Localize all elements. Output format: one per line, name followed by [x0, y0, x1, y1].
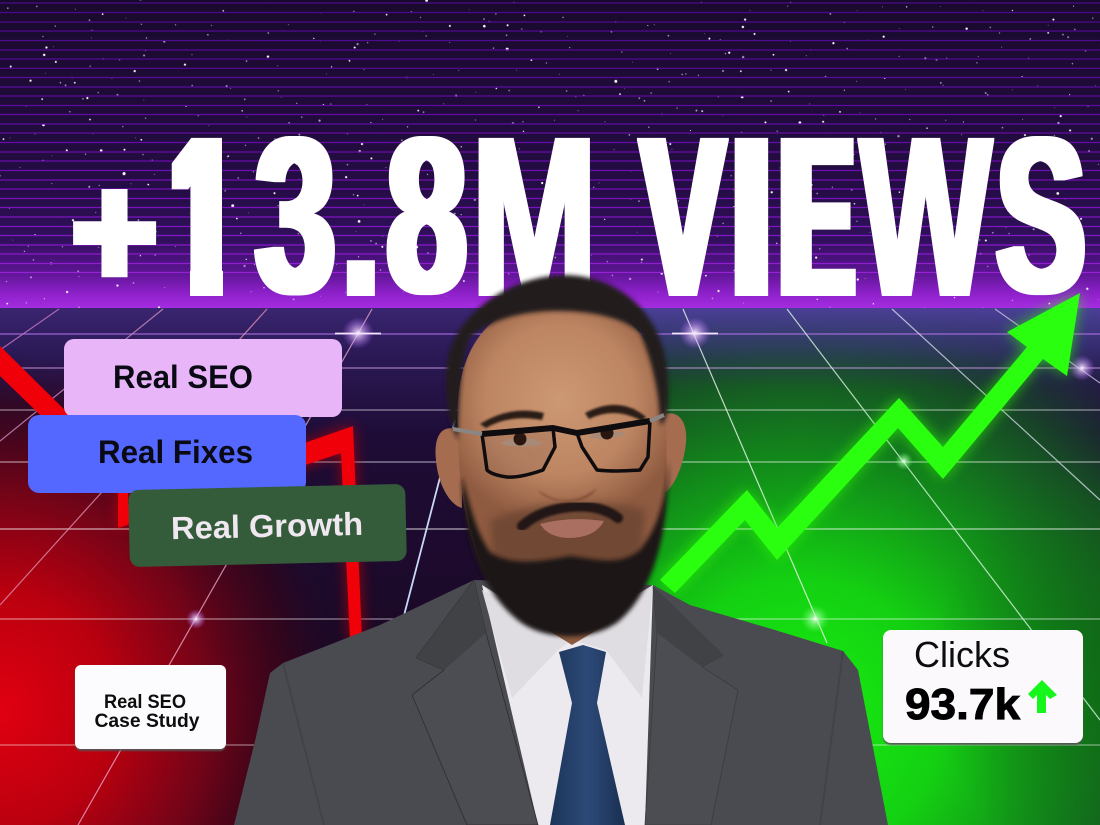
- stubble around mouth: [490, 502, 645, 575]
- icon: green rising arrow: [660, 293, 1080, 593]
- moustache: [522, 506, 618, 526]
- card: Clicks stat: Clicks: [914, 634, 1010, 675]
- eyebrows: [480, 411, 544, 428]
- headline: 3: [256, 92, 335, 340]
- tag: Real Growth: [128, 484, 407, 567]
- tag: Real Growth: Real Growth: [171, 506, 363, 546]
- card: Clicks stat: [883, 630, 1083, 743]
- face: [457, 298, 667, 601]
- shirt: [482, 585, 653, 825]
- headline: W: [860, 91, 992, 344]
- necktie: [550, 645, 625, 825]
- tag: Real Fixes: Real Fixes: [98, 434, 253, 470]
- tag: Real SEO: [64, 339, 342, 417]
- tag: Real SEO: Real SEO: [113, 359, 253, 395]
- nose shadow: [538, 488, 597, 502]
- lens tint: [482, 428, 555, 477]
- icon: small green up arrow: [1028, 680, 1057, 713]
- portrait of man in suit and glasses: [234, 275, 888, 825]
- headline: +: [72, 141, 157, 322]
- suit sleeve seams: [283, 651, 843, 825]
- right lapels: [645, 587, 738, 825]
- floor grid lines: [0, 309, 1100, 825]
- flares on grid intersections: [186, 317, 1095, 633]
- glasses: [453, 415, 664, 477]
- beard: [462, 460, 669, 636]
- tag: Real Fixes: [28, 415, 306, 493]
- lips: [540, 519, 604, 538]
- background: starry sky with scan lines: [0, 0, 1100, 308]
- headline: [73, 136, 1085, 296]
- left upper collar: [416, 580, 486, 670]
- hair: [446, 275, 668, 440]
- suit jacket: [234, 580, 888, 825]
- headline: I: [734, 91, 768, 344]
- card: Real SEO Case Study: [75, 665, 226, 749]
- headline: 1: [172, 91, 235, 344]
- icon: red falling arrow: [0, 346, 362, 640]
- background: neon floor: [0, 308, 1100, 825]
- right upper collar: [653, 587, 723, 667]
- left lapels: [412, 580, 538, 825]
- headline: M: [472, 91, 597, 344]
- headline: .: [349, 91, 373, 344]
- card: Real SEO Case Study: Real SEO: [104, 692, 186, 713]
- headline: E: [782, 91, 852, 344]
- eyes: [500, 437, 543, 446]
- ears: [436, 428, 462, 508]
- card: Real SEO Case Study: Case Study: [94, 711, 200, 732]
- shirt collar: [482, 585, 653, 698]
- headline: V: [641, 91, 725, 344]
- neck: [540, 625, 605, 645]
- headline: 8: [387, 92, 466, 340]
- card: Clicks stat: 93.7k: [905, 680, 1021, 729]
